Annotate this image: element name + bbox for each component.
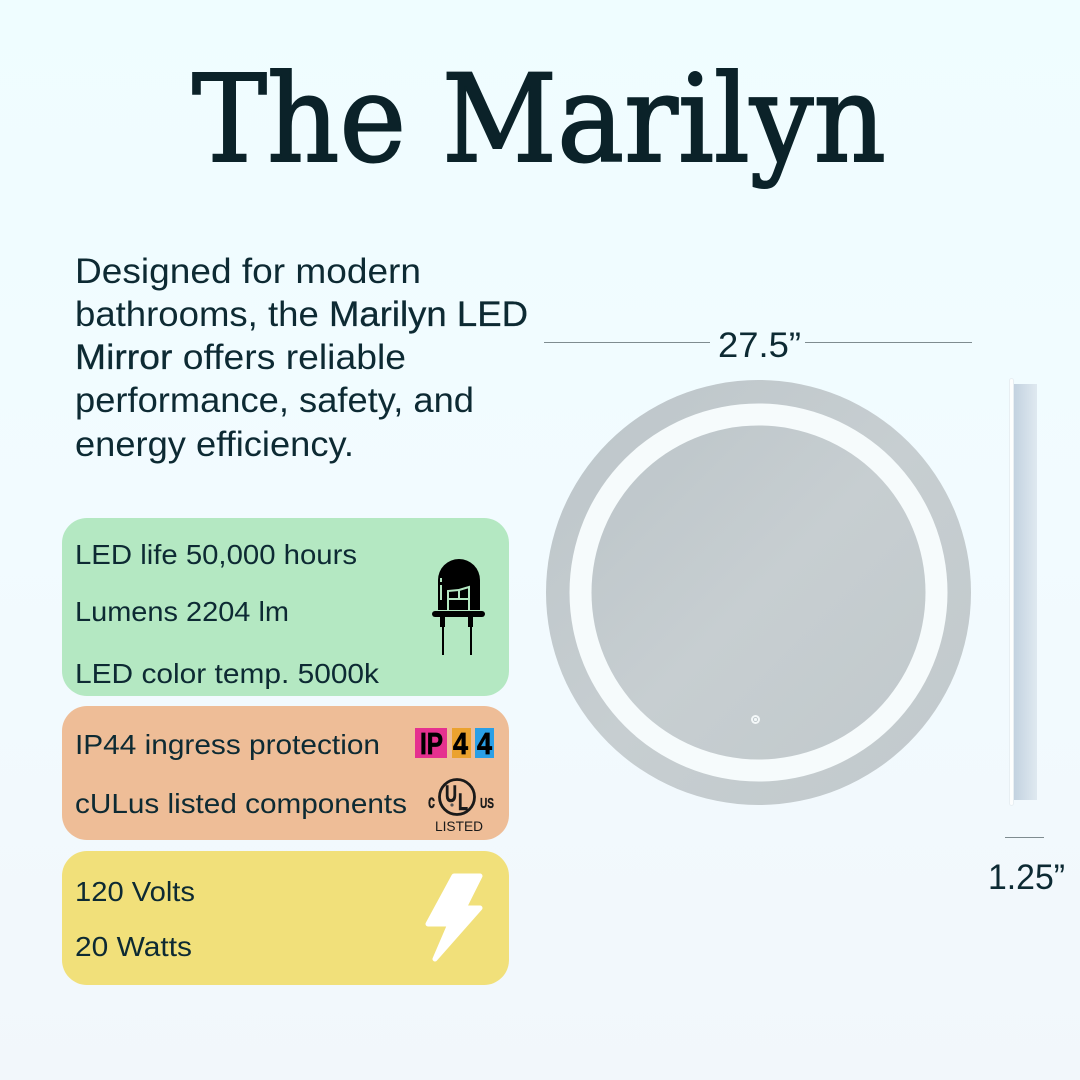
- icon: IP44 badge: 4: [477, 726, 493, 761]
- icon: IP44 badge: [415, 726, 494, 761]
- icon: LED bulb: [432, 559, 485, 655]
- icon: IP44 badge: IP: [420, 726, 443, 761]
- panel: power: 20 Watts: [75, 931, 192, 962]
- width dimension 27.5 inches: 27.5”: [718, 326, 801, 365]
- panel: LED specs: Lumens 2204 lm: [75, 596, 289, 627]
- icon: cULus listed mark: U: [445, 781, 457, 808]
- intro text block: Designed for modern: [75, 252, 421, 291]
- intro text block: energy efficiency.: [75, 425, 354, 464]
- depth dimension 1.25 inches: [988, 837, 1065, 897]
- panel: LED specs: [62, 518, 509, 696]
- intro text block: bathrooms, the Marilyn LED: [75, 295, 528, 334]
- panel: power: 120 Volts: [75, 876, 195, 907]
- icon: IP44 badge: 4: [453, 726, 469, 761]
- icon: cULus listed mark: LISTED: [435, 818, 483, 834]
- icon: cULus listed mark: c: [428, 792, 435, 813]
- panel: certifications: [62, 706, 509, 840]
- intro text block: performance, safety, and: [75, 381, 474, 420]
- depth dimension 1.25 inches: 1.25”: [988, 858, 1065, 897]
- intro text block: [75, 252, 528, 464]
- panel: LED specs: LED color temp. 5000k: [75, 658, 380, 689]
- icon: lightning bolt: [428, 876, 480, 959]
- icon: cULus listed mark: US: [480, 796, 494, 812]
- icon: touch sensor: [751, 715, 760, 724]
- icon: cULus listed mark: [428, 780, 494, 834]
- mirror side view: [1010, 378, 1037, 806]
- intro text block: Mirror offers reliable: [75, 338, 406, 377]
- panel: certifications: cULus listed components: [75, 788, 407, 819]
- panel: certifications: IP44 ingress protection: [75, 729, 380, 760]
- icon: cULus listed mark: L: [458, 789, 468, 816]
- title: The Marilyn: [192, 49, 886, 190]
- round LED mirror: [546, 380, 971, 805]
- panel: LED specs: LED life 50,000 hours: [75, 539, 357, 570]
- panel: power: [62, 851, 509, 985]
